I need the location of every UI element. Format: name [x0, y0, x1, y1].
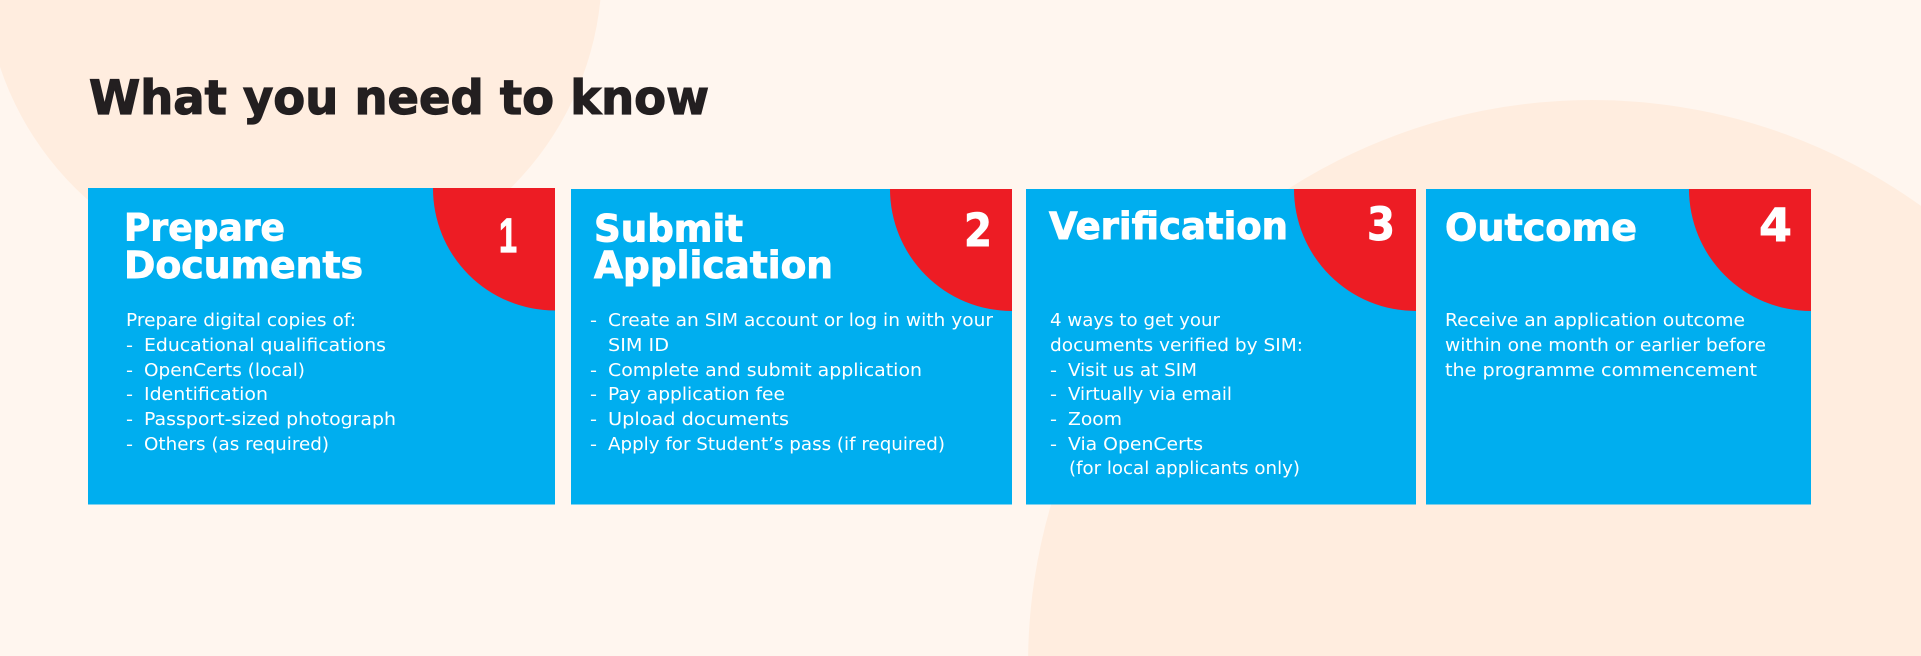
- heading: prepare documents: [124, 206, 363, 287]
- text block: documents list: Others (as required): [144, 434, 329, 455]
- text block: documents list: -: [126, 434, 133, 455]
- text block: verification ways: [1050, 310, 1303, 479]
- text block: outcome description: [1445, 310, 1766, 381]
- text block: documents list: Educational qualifications: [144, 335, 386, 356]
- red corner badge 4: [1689, 189, 1811, 311]
- text block: application steps: Apply for Student’s pass (if required): [608, 434, 945, 455]
- heading: submit application: Application: [594, 244, 833, 287]
- text block: verification ways: -: [1050, 434, 1057, 455]
- text block: application steps: Upload documents: [608, 409, 789, 430]
- text block: documents list: Passport-sized photograph: [144, 409, 396, 430]
- panel: step 4 outcome: [1426, 189, 1811, 504]
- heading: verification: Verification: [1049, 205, 1288, 248]
- text block: verification ways: -: [1050, 409, 1057, 430]
- red corner badge 1: [433, 188, 555, 310]
- text block: outcome description: the programme commencement: [1445, 360, 1757, 381]
- text block: verification ways: Via OpenCerts: [1068, 434, 1203, 455]
- text block: outcome description: within one month or earlier before: [1445, 335, 1766, 356]
- heading: submit application: Submit: [594, 208, 743, 250]
- text block: verification ways: Visit us at SIM: [1068, 360, 1197, 381]
- text block: application steps: Complete and submit application: [608, 360, 922, 381]
- text block: verification ways: -: [1050, 360, 1057, 381]
- step number 4: 4: [1759, 199, 1792, 252]
- text block: documents list: OpenCerts (local): [144, 360, 305, 381]
- text block: documents list: Identification: [144, 384, 268, 405]
- text block: verification ways: Zoom: [1068, 409, 1122, 430]
- text block: outcome description: Receive an application outcome: [1445, 310, 1745, 331]
- text block: application steps: -: [590, 360, 597, 381]
- red corner badge 3: [1294, 189, 1416, 311]
- text block: documents list: -: [126, 409, 133, 430]
- step number 3: 3: [1367, 198, 1395, 251]
- heading: prepare documents: Prepare: [124, 206, 285, 250]
- title: What you need to know: [89, 71, 709, 126]
- text block: verification ways: 4 ways to get your: [1050, 310, 1221, 331]
- panel: step 1 prepare documents: [88, 188, 555, 504]
- text block: documents list: -: [126, 335, 133, 356]
- text block: application steps: Pay application fee: [608, 384, 785, 405]
- text block: verification ways: -: [1050, 384, 1057, 405]
- text block: verification ways: documents verified by SIM:: [1050, 335, 1303, 356]
- panel: step 2 submit application: [571, 189, 1012, 504]
- text block: verification ways: Virtually via email: [1068, 384, 1232, 405]
- text block: documents list: -: [126, 360, 133, 381]
- heading: submit application: [594, 208, 833, 287]
- text block: application steps: SIM ID: [608, 335, 669, 356]
- text block: application steps: -: [590, 310, 597, 331]
- text block: verification ways: (for local applicants only): [1069, 458, 1300, 479]
- red corner badge 2: [890, 189, 1012, 311]
- text block: application steps: -: [590, 434, 597, 455]
- text block: documents list: Prepare digital copies of:: [126, 310, 356, 331]
- text block: documents list: [126, 310, 396, 455]
- heading: outcome: Outcome: [1445, 206, 1637, 250]
- text block: application steps: Create an SIM account or log in with your: [608, 310, 994, 331]
- step number 1: 1: [499, 210, 517, 263]
- panel: step 3 verification: [1026, 189, 1416, 504]
- text block: application steps: [590, 310, 994, 455]
- text block: application steps: -: [590, 384, 597, 405]
- text block: documents list: -: [126, 384, 133, 405]
- heading: prepare documents: Documents: [124, 244, 363, 287]
- step number 2: 2: [964, 204, 992, 257]
- text block: application steps: -: [590, 409, 597, 430]
